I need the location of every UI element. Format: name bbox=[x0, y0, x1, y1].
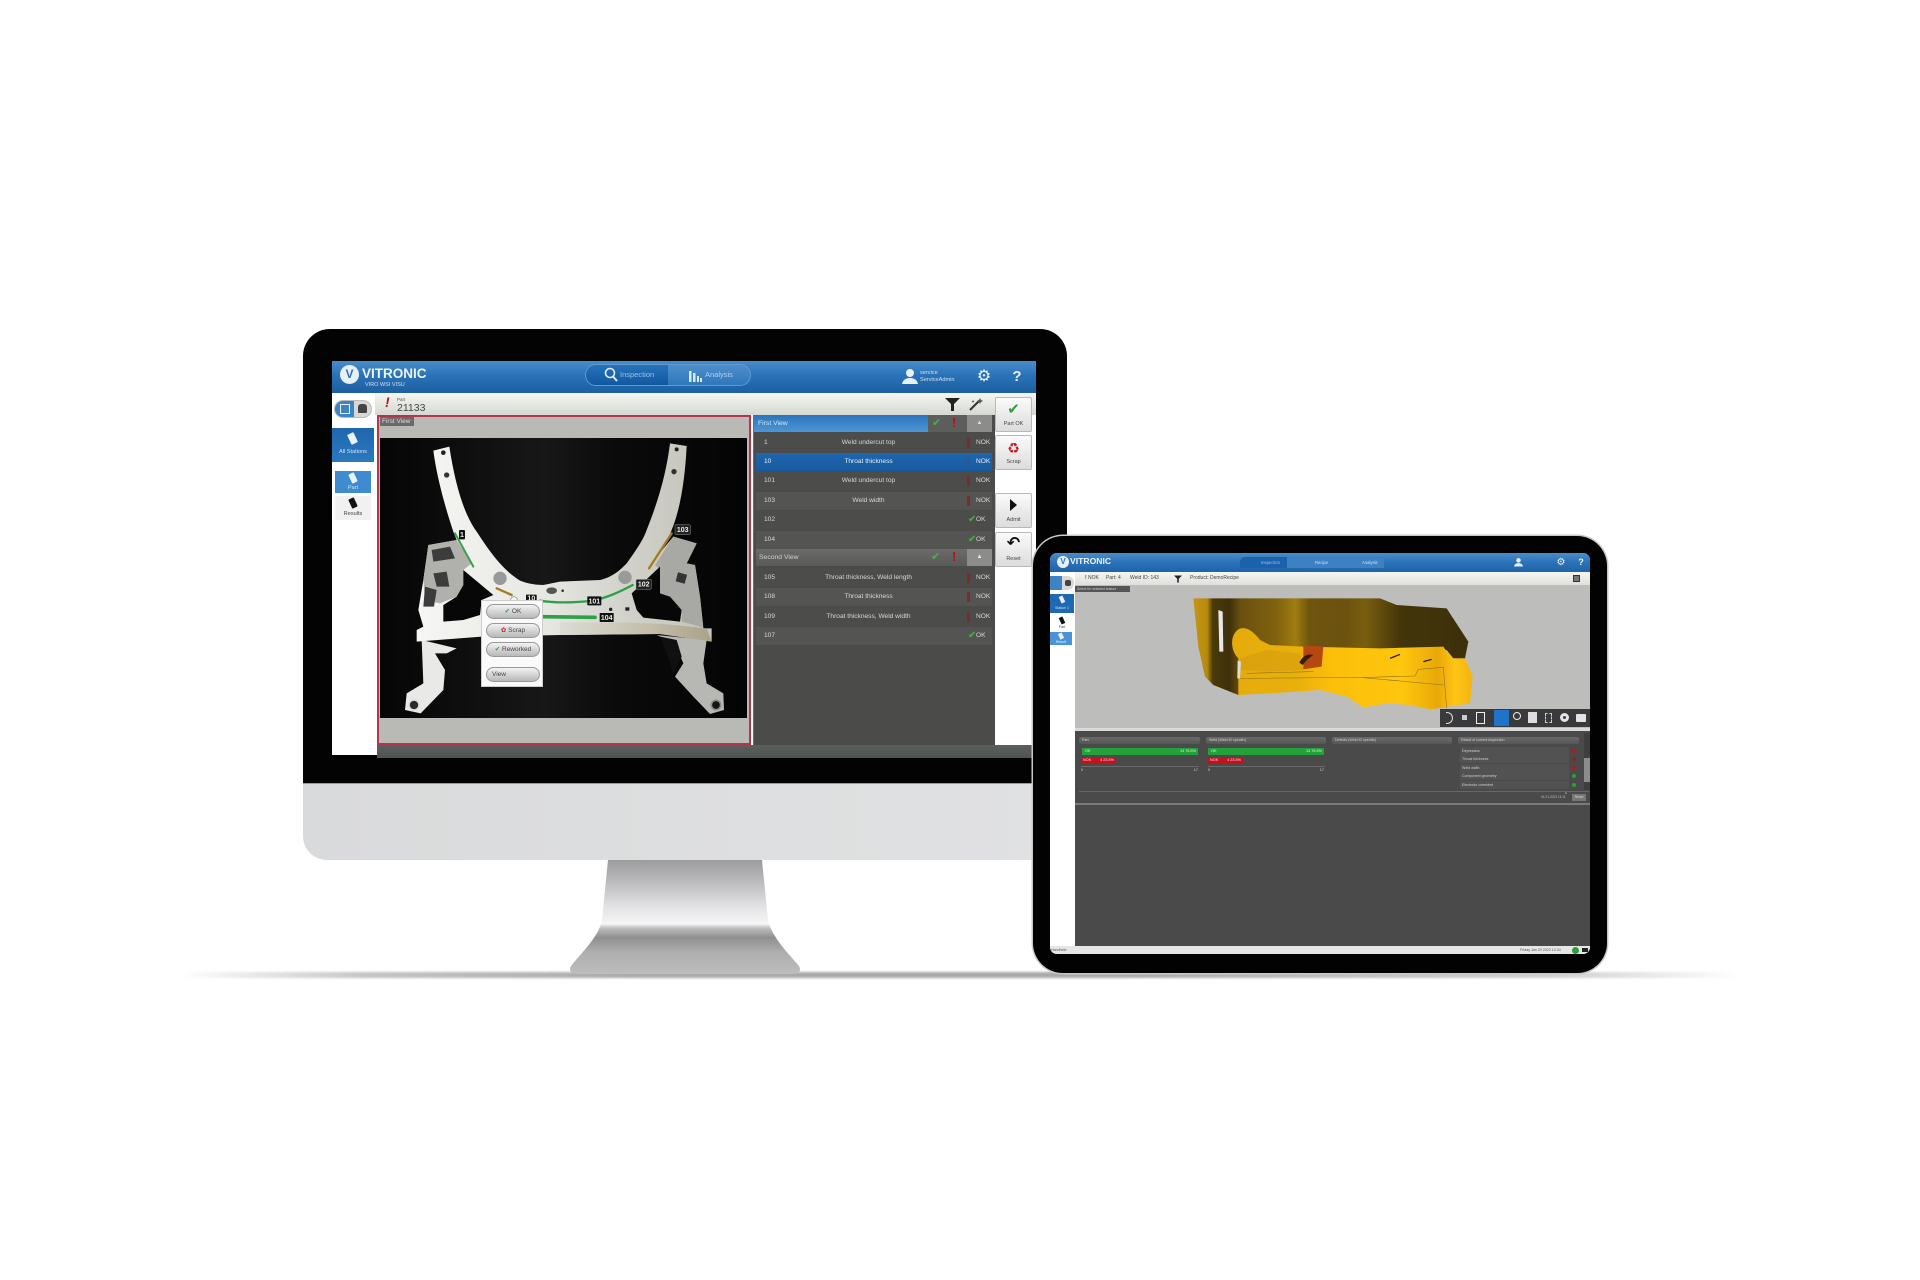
header blue title: First View bbox=[758, 420, 788, 427]
tablet user icon bbox=[1514, 558, 1523, 566]
row 104: OK bbox=[976, 536, 986, 543]
statistics panel: 5 bbox=[1565, 765, 1567, 769]
part dropdown: Part bbox=[1082, 738, 1089, 742]
row 103: 103 bbox=[764, 497, 775, 504]
defects dropdown bbox=[1332, 737, 1452, 744]
selection pointer bbox=[511, 597, 517, 603]
filter icon bbox=[945, 398, 960, 411]
frame tag bbox=[380, 417, 414, 426]
row 109: Throat thickness, Weld width bbox=[826, 613, 911, 620]
tool layers bbox=[1528, 712, 1537, 723]
row 10 selected bbox=[756, 453, 992, 471]
connection indicator bbox=[1572, 947, 1579, 954]
weld dropdown bbox=[1206, 737, 1326, 744]
inspection label: Inspection bbox=[620, 370, 654, 379]
row 107: 107 bbox=[764, 632, 775, 639]
ok button: ✔ OK bbox=[505, 608, 521, 615]
product name: VIRO WSI VISU bbox=[365, 382, 405, 388]
recycle icon: ♻ bbox=[1007, 440, 1020, 456]
viewer separator bbox=[1075, 728, 1590, 731]
scrap button: ✿ Scrap bbox=[501, 627, 525, 634]
timestamp: 01.01.2023 14:11 bbox=[1541, 795, 1566, 799]
tablet result button bbox=[1050, 632, 1072, 645]
row 103 bbox=[756, 492, 992, 510]
frame tag: First View bbox=[382, 418, 410, 425]
settings icon: ⚙ bbox=[977, 368, 991, 385]
analysis tab: Analysis bbox=[1362, 560, 1378, 565]
left casting hole bbox=[443, 570, 493, 622]
product name: Product: DemoRecipe bbox=[1190, 575, 1239, 581]
part label: Part bbox=[348, 485, 358, 491]
left leg bbox=[405, 640, 457, 713]
analysis tab bbox=[689, 370, 733, 382]
station glyph bbox=[347, 432, 358, 445]
reset button: Reset bbox=[1006, 556, 1021, 562]
right casting hole bbox=[632, 567, 682, 622]
date label: Friday Jan 20 2023 12:34 bbox=[1520, 948, 1561, 952]
toggle active bbox=[1050, 576, 1062, 590]
analysis icon bbox=[689, 371, 702, 382]
monitor bbox=[303, 329, 1067, 860]
result row throat: Throat thickness bbox=[1462, 757, 1488, 761]
result row electrode: Electrode corrected bbox=[1462, 783, 1493, 787]
part label: Part bbox=[1059, 625, 1065, 629]
tablet part button bbox=[1050, 617, 1074, 630]
reset chip bbox=[1572, 794, 1586, 801]
user icon bbox=[902, 369, 918, 384]
tool active bbox=[1494, 710, 1509, 726]
left casting shading bbox=[423, 540, 472, 603]
row 104 bbox=[756, 531, 992, 549]
header blue title bbox=[754, 415, 928, 432]
scrap action button: Scrap bbox=[1006, 459, 1021, 465]
part nok bar bbox=[1081, 757, 1116, 764]
row 108 bbox=[756, 588, 992, 606]
part photo with weld seams bbox=[380, 438, 747, 718]
result row geometry bbox=[1460, 772, 1569, 780]
first view image frame bbox=[377, 415, 751, 745]
row 105: Throat thickness, Weld length bbox=[825, 574, 912, 581]
part scale: 17 bbox=[1194, 768, 1198, 772]
seam labels: 104 bbox=[601, 615, 613, 622]
user name: service bbox=[920, 370, 938, 376]
monitor screen bbox=[332, 361, 1036, 758]
white screen base bbox=[332, 361, 1036, 755]
result dot bbox=[1572, 749, 1576, 753]
left casting cavities bbox=[423, 547, 455, 607]
tablet tabs bbox=[1240, 557, 1384, 568]
row 109 bbox=[756, 608, 992, 626]
seam labels: 10 bbox=[527, 595, 535, 602]
nok flag: ! bbox=[385, 394, 390, 410]
part glyph bbox=[348, 472, 358, 484]
row 103: NOK bbox=[976, 497, 990, 504]
collapse button: ▲ bbox=[977, 420, 982, 426]
part glyph bbox=[1059, 616, 1065, 625]
check icon: ✔ bbox=[1007, 401, 1020, 418]
tool settings bbox=[1560, 713, 1569, 722]
brand name: VITRONIC bbox=[362, 366, 427, 381]
mode label: Handheld bbox=[1051, 948, 1066, 952]
arch holes bbox=[441, 447, 679, 611]
all stations label: All Stations bbox=[339, 449, 367, 455]
view button: View bbox=[492, 671, 506, 678]
tablet filter icon bbox=[1174, 576, 1182, 582]
tool camera bbox=[1576, 714, 1586, 722]
result dot bbox=[1572, 766, 1576, 770]
weld dropdown: Weld (Weld ID specific) bbox=[1209, 738, 1246, 742]
result row electrode bbox=[1460, 781, 1569, 789]
weld scale: 0 bbox=[1208, 768, 1210, 772]
weld nok bar bbox=[1208, 757, 1243, 764]
sidebar bbox=[332, 393, 375, 755]
part nok bar: 4 23.5% bbox=[1100, 758, 1114, 762]
right casting cavity bbox=[676, 572, 687, 584]
row 10 selected: Throat thickness bbox=[844, 458, 893, 465]
results label: Results bbox=[344, 511, 362, 517]
toggle glyph bbox=[1065, 580, 1071, 586]
row 101: NOK bbox=[976, 477, 990, 484]
user name: ServiceAdmin bbox=[920, 376, 955, 382]
edit icon bbox=[1573, 575, 1580, 582]
left foot hole bbox=[409, 700, 419, 710]
right leg shadow bbox=[660, 637, 682, 673]
tablet app header bbox=[1050, 553, 1590, 572]
part dropdown bbox=[1079, 737, 1200, 744]
undo icon: ↶ bbox=[1007, 535, 1020, 552]
collapse button: ▲ bbox=[977, 554, 982, 560]
result dot bbox=[1572, 774, 1576, 778]
weld nok bar: 4 23.5% bbox=[1227, 758, 1241, 762]
user block bbox=[902, 369, 955, 384]
row 105 bbox=[756, 569, 992, 587]
result row width: Weld width bbox=[1462, 766, 1480, 770]
tool rotate bbox=[1446, 712, 1453, 724]
result row depression: Depression bbox=[1462, 749, 1480, 753]
seam labels: 103 bbox=[677, 527, 689, 534]
station label: Station 1 bbox=[1055, 606, 1069, 610]
second view header bbox=[756, 549, 992, 566]
part toolbar bbox=[375, 393, 1036, 415]
logo bbox=[340, 365, 427, 388]
row 101: Weld undercut top bbox=[842, 477, 895, 484]
seam labels: 102 bbox=[638, 582, 650, 589]
row 108: NOK bbox=[976, 593, 990, 600]
result dot bbox=[1572, 757, 1576, 761]
row 1: NOK bbox=[976, 439, 990, 446]
row 102 bbox=[756, 511, 992, 529]
result row geometry: Component geometry bbox=[1462, 774, 1497, 778]
view toggle bbox=[334, 400, 372, 418]
tablet brand name: VITRONIC bbox=[1070, 556, 1111, 566]
weld ok bar: 13 76.5% bbox=[1306, 749, 1322, 753]
tan crossbar bbox=[560, 623, 712, 642]
statistics panel: 0 bbox=[1565, 782, 1567, 786]
reset button bbox=[995, 532, 1032, 567]
tool cut bbox=[1545, 713, 1552, 723]
tablet bbox=[1033, 536, 1607, 973]
seam labels: 101 bbox=[588, 598, 600, 605]
3d viewer bbox=[1075, 585, 1590, 728]
tablet screen bbox=[1050, 553, 1590, 954]
green weld seams bbox=[455, 533, 672, 617]
analysis label: Analysis bbox=[705, 370, 733, 379]
app header bar bbox=[332, 361, 1036, 393]
part glyph bbox=[358, 404, 367, 413]
result dot bbox=[1572, 783, 1576, 787]
search icon bbox=[604, 368, 618, 382]
row 107: OK bbox=[976, 632, 986, 639]
part caption: Part bbox=[397, 397, 405, 402]
part ok bar: 13 76.5% bbox=[1180, 749, 1196, 753]
right foot hole bbox=[711, 700, 721, 710]
row 107: ✔ bbox=[968, 630, 976, 641]
active tab: Inspection bbox=[1261, 560, 1280, 565]
recipe tab: Recipe bbox=[1315, 560, 1328, 565]
weld nok bar: NOK bbox=[1210, 758, 1218, 762]
tablet toolbar bbox=[1075, 572, 1590, 585]
inspection results list bbox=[753, 415, 995, 745]
subframe body bbox=[417, 443, 712, 642]
lower panel divider bbox=[1075, 803, 1590, 805]
floor shadow line bbox=[180, 972, 1740, 978]
seam labels: 1 bbox=[460, 532, 464, 539]
row 107 bbox=[756, 627, 992, 645]
result row throat bbox=[1460, 755, 1569, 763]
part ok button: Part OK bbox=[1004, 421, 1023, 427]
result label: Result bbox=[1056, 640, 1066, 644]
first view header bbox=[754, 415, 992, 432]
viewer tool strip bbox=[1440, 709, 1590, 727]
part info: Part: 4 bbox=[1106, 575, 1121, 581]
weld scale: 17 bbox=[1320, 768, 1324, 772]
weld ok bar bbox=[1208, 748, 1324, 755]
nok status: ! NOK bbox=[1085, 575, 1099, 581]
result row width bbox=[1460, 764, 1569, 772]
play icon bbox=[1010, 499, 1017, 511]
admit button bbox=[995, 493, 1032, 528]
row 108: Throat thickness bbox=[844, 593, 893, 600]
row 10 selected: NOK bbox=[976, 458, 990, 465]
result dropdown bbox=[1458, 737, 1579, 744]
scrap button bbox=[486, 623, 540, 638]
right casting shading bbox=[655, 537, 703, 627]
ok button bbox=[486, 604, 540, 619]
logo badge: V bbox=[345, 367, 354, 381]
summary divider bbox=[1079, 791, 1589, 792]
row 101 bbox=[756, 472, 992, 490]
nok count: ! bbox=[952, 549, 956, 564]
help icon: ? bbox=[1012, 368, 1022, 385]
scrap action button bbox=[995, 435, 1032, 470]
row 108: 108 bbox=[764, 593, 775, 600]
viewer tag: Select for selected feature bbox=[1077, 587, 1116, 591]
station button bbox=[1050, 594, 1074, 613]
tablet settings icon: ⚙ bbox=[1557, 557, 1565, 568]
seam labels bbox=[459, 525, 690, 622]
tablet sidebar bbox=[1050, 572, 1075, 946]
result dropdown: Result of current inspection bbox=[1461, 738, 1505, 742]
statistics panel bbox=[1075, 731, 1590, 946]
view button bbox=[486, 667, 540, 682]
row 105: NOK bbox=[976, 574, 990, 581]
part ok bar bbox=[1082, 748, 1198, 755]
scrollbar bbox=[1584, 733, 1590, 790]
nok count: ! bbox=[952, 415, 956, 430]
station glyph bbox=[1059, 595, 1065, 604]
row 102: ✔ bbox=[968, 514, 976, 525]
row 1: 1 bbox=[764, 439, 768, 446]
part scale bbox=[1081, 766, 1199, 774]
row 109: NOK bbox=[976, 613, 990, 620]
tool point bbox=[1462, 715, 1467, 720]
viewer tag bbox=[1075, 586, 1130, 592]
navigation tabs bbox=[585, 364, 751, 386]
tablet logo badge: V bbox=[1060, 557, 1066, 566]
right leg bbox=[657, 635, 724, 714]
row 10 selected: 10 bbox=[764, 458, 771, 465]
logo badge bbox=[340, 365, 359, 384]
row 102: OK bbox=[976, 516, 986, 523]
weld id: Weld ID: 143 bbox=[1130, 575, 1159, 581]
weld ok bar: OK bbox=[1211, 749, 1216, 753]
row 1 bbox=[756, 434, 992, 452]
toggle active bbox=[335, 401, 354, 417]
reset chip: Reset bbox=[1575, 795, 1583, 799]
monitor black bezel bbox=[303, 329, 1067, 783]
collapse button bbox=[967, 549, 992, 566]
row 102: 102 bbox=[764, 516, 775, 523]
row 105: 105 bbox=[764, 574, 775, 581]
all stations button bbox=[332, 428, 374, 462]
tool frame bbox=[1476, 712, 1485, 724]
results button bbox=[335, 496, 371, 520]
reworked button: ✔ Reworked bbox=[495, 646, 531, 653]
part ok button bbox=[995, 397, 1032, 432]
admit button: Admit bbox=[1006, 517, 1021, 523]
tablet logo badge bbox=[1057, 556, 1069, 568]
defects dropdown: Defects (Weld ID specific) bbox=[1335, 738, 1376, 742]
collapse button bbox=[967, 415, 992, 432]
part number: 21133 bbox=[397, 402, 425, 414]
statistics panel: 0 bbox=[1565, 791, 1567, 795]
part scale: 0 bbox=[1081, 768, 1083, 772]
weld scale bbox=[1208, 766, 1325, 774]
statistics panel: 3 bbox=[1565, 757, 1567, 761]
context popup menu bbox=[481, 600, 543, 687]
tablet help icon: ? bbox=[1578, 557, 1584, 567]
header title: Second View bbox=[759, 554, 799, 561]
row 104: 104 bbox=[764, 536, 775, 543]
part nok bar: NOK bbox=[1083, 758, 1091, 762]
wand icon bbox=[969, 398, 983, 411]
3d weld surface scan bbox=[1193, 598, 1473, 710]
user name bbox=[920, 370, 955, 382]
bottom status strip bbox=[377, 745, 1032, 758]
row 1: Weld undercut top bbox=[842, 439, 895, 446]
reworked button bbox=[486, 642, 540, 657]
tool zoom bbox=[1513, 712, 1521, 720]
tablet status bar bbox=[1050, 946, 1590, 954]
ok count: ✔ bbox=[931, 551, 940, 563]
row 101: 101 bbox=[764, 477, 775, 484]
row 104: ✔ bbox=[968, 534, 976, 545]
statistics panel: 5 bbox=[1565, 774, 1567, 778]
results glyph bbox=[348, 497, 358, 509]
part button bbox=[335, 471, 371, 493]
active tab bbox=[1240, 557, 1287, 568]
status icon bbox=[1582, 948, 1588, 952]
chart glyph bbox=[340, 404, 350, 414]
status counts bbox=[928, 415, 967, 432]
result row depression bbox=[1460, 747, 1569, 755]
active tab inspection bbox=[586, 365, 668, 385]
monitor silver chin bbox=[303, 783, 1067, 860]
result glyph bbox=[1058, 632, 1064, 640]
part ok bar: OK bbox=[1085, 749, 1090, 753]
row 103: Weld width bbox=[852, 497, 885, 504]
monitor stand bbox=[570, 860, 800, 974]
row 109: 109 bbox=[764, 613, 775, 620]
scroll thumb bbox=[1584, 758, 1590, 782]
ok count: ✔ bbox=[932, 417, 941, 429]
tablet view toggle bbox=[1050, 576, 1074, 590]
